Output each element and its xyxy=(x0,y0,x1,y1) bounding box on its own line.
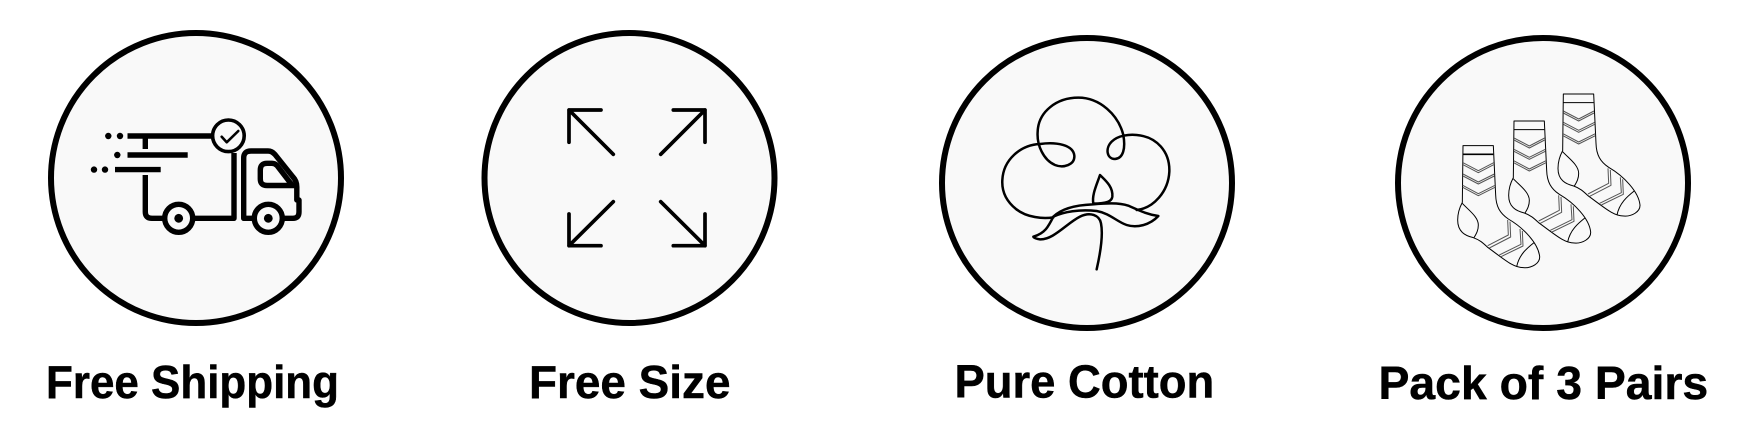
icon: middle sock xyxy=(1509,121,1591,243)
panel: free size xyxy=(484,33,774,408)
icon: expand arrows xyxy=(569,110,705,246)
panel: pure cotton xyxy=(942,38,1232,408)
icon: right sock xyxy=(1558,94,1640,216)
icon: delivery truck xyxy=(91,120,299,232)
circle badge: free size xyxy=(484,33,774,323)
icon: left sock xyxy=(1458,146,1540,268)
circle badge: pure cotton xyxy=(942,38,1232,328)
icon: three socks xyxy=(1458,94,1640,268)
label: pack of 3 pairs: Pack of 3 Pairs xyxy=(1378,357,1708,409)
panel: free shipping xyxy=(46,33,341,408)
label: free size: Free Size xyxy=(529,356,730,408)
label: free shipping: Free Shipping xyxy=(46,356,339,408)
label: pure cotton: Pure Cotton xyxy=(954,356,1214,408)
circle badge: pack of 3 pairs xyxy=(1398,38,1688,328)
circle badge: free shipping xyxy=(51,33,341,323)
panel: pack of 3 pairs xyxy=(1378,38,1708,409)
icon: cotton plant xyxy=(1002,98,1169,269)
